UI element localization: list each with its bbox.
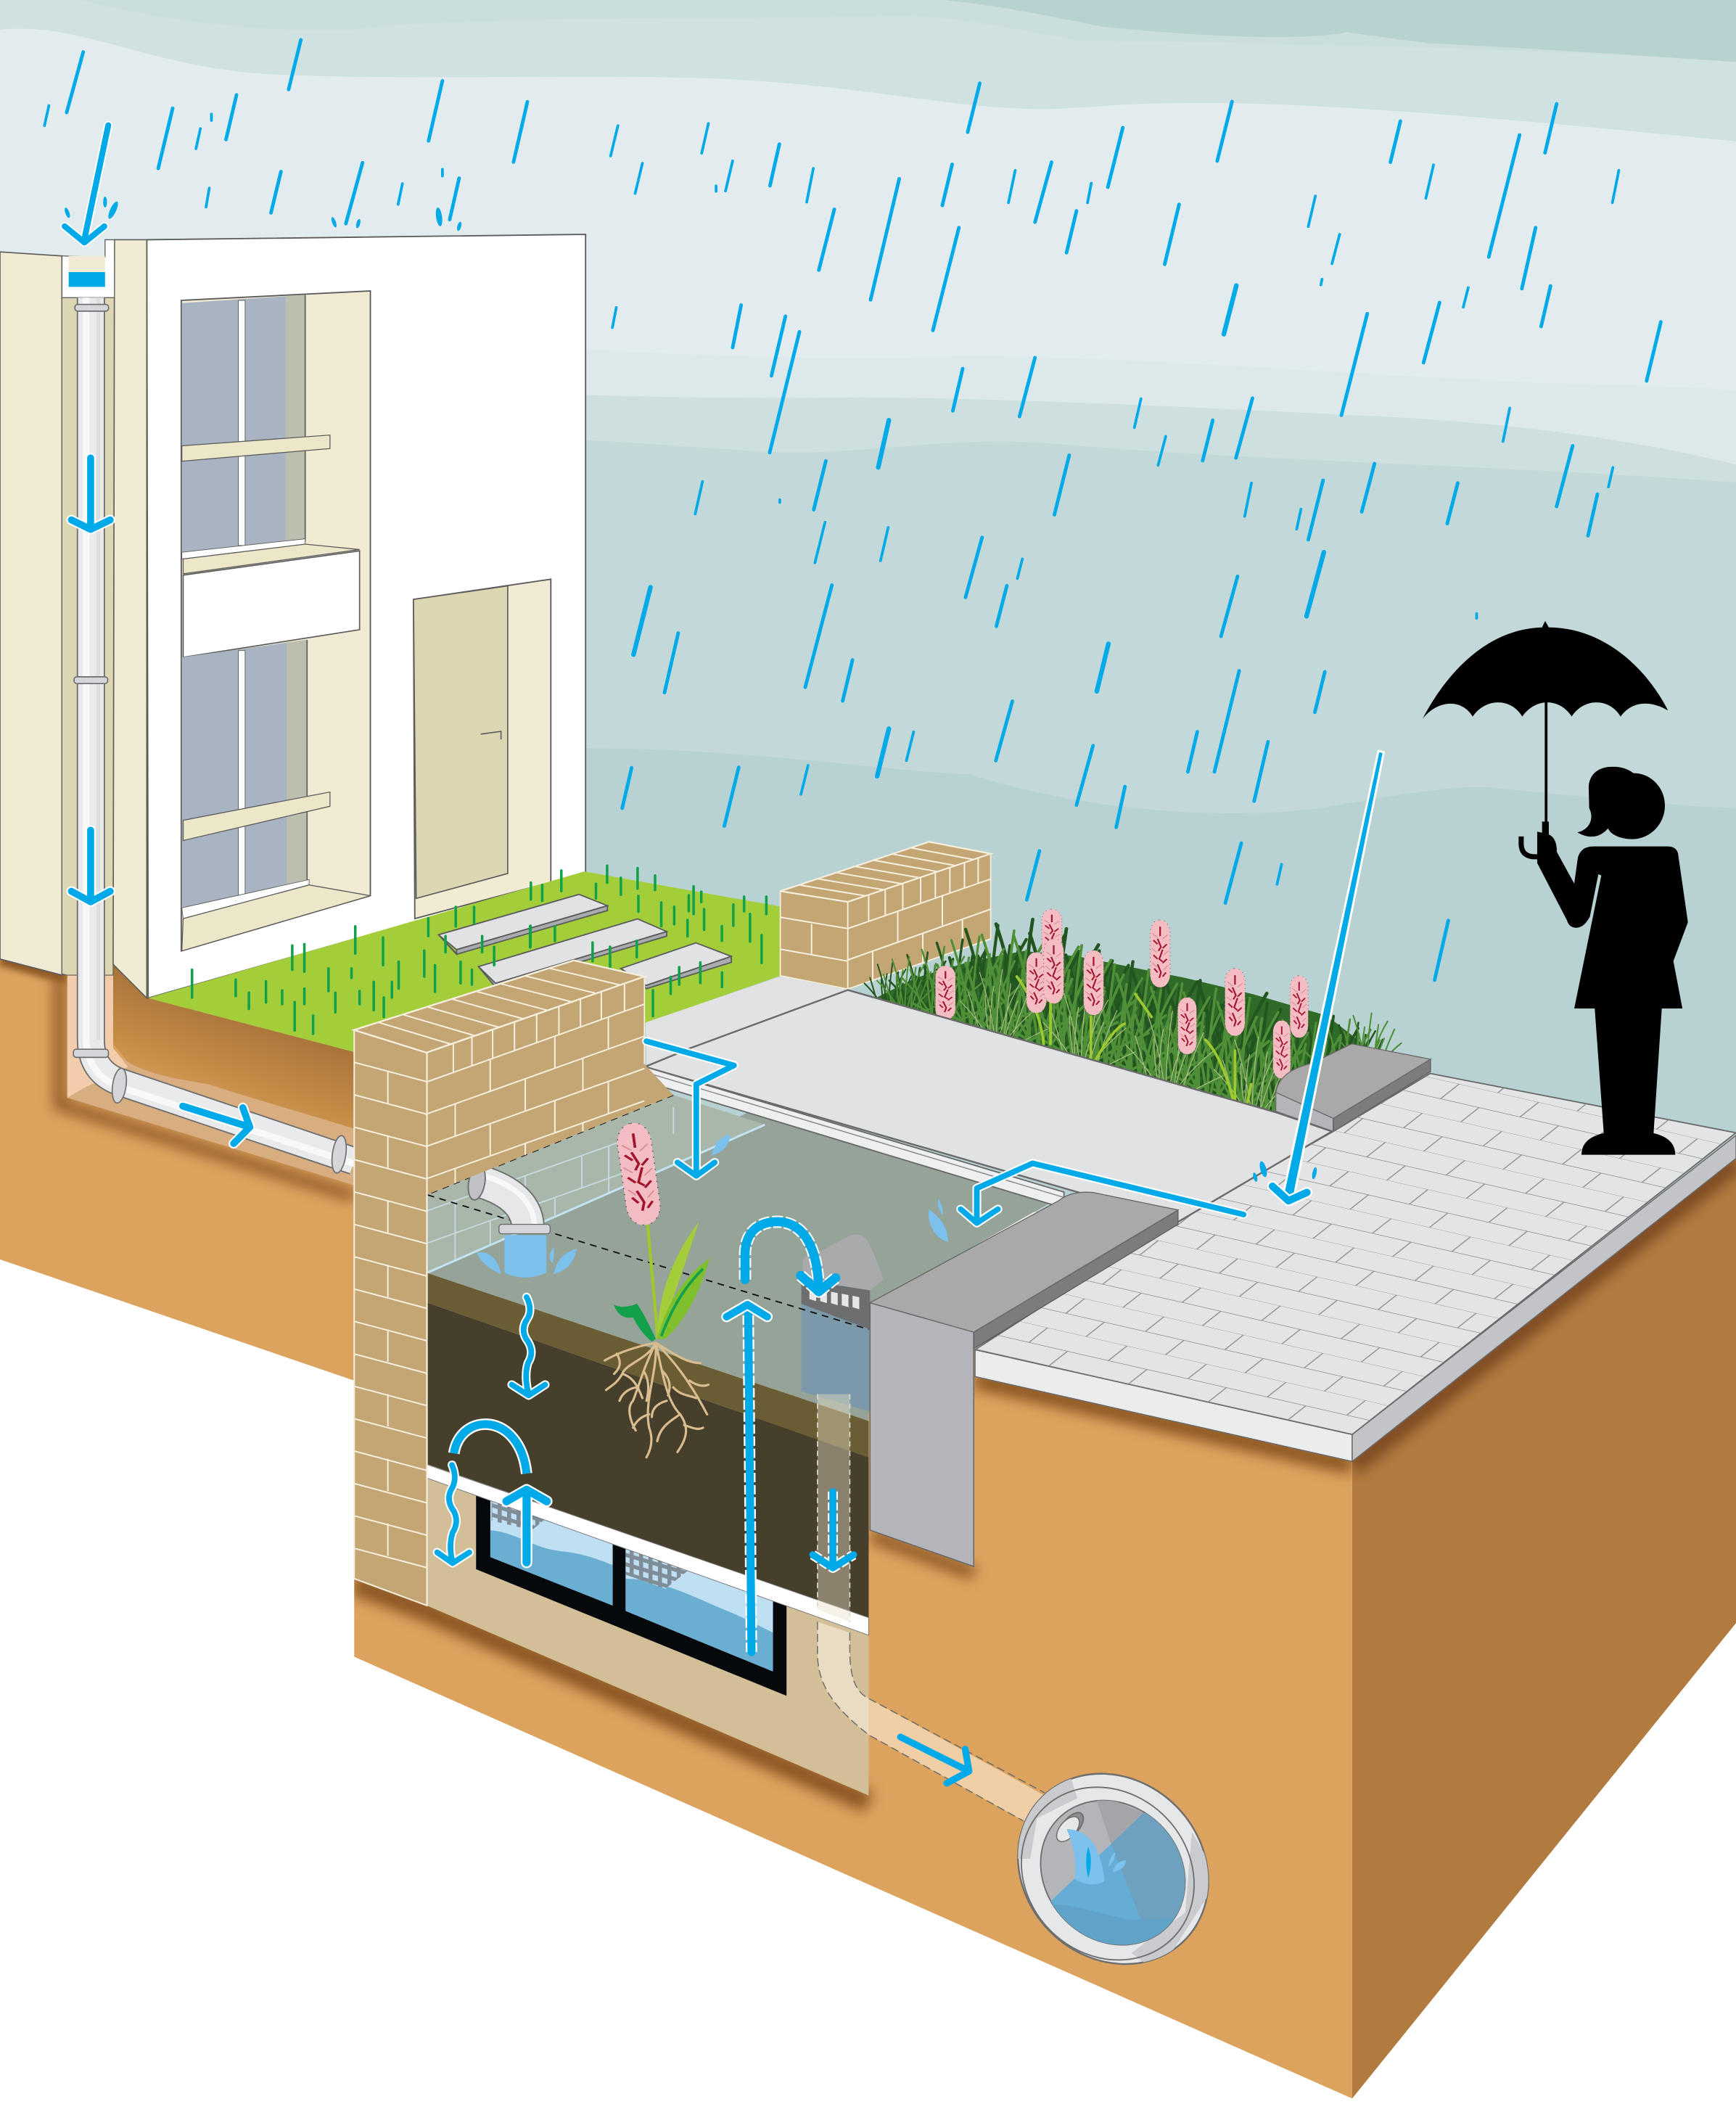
upper soil layer — [427, 1273, 868, 1458]
rain hopper — [62, 239, 115, 297]
leaves — [657, 1222, 699, 1334]
flow arrows — [65, 126, 1384, 1783]
lower glazing — [182, 640, 309, 919]
door handle — [481, 731, 501, 739]
balcony white panel — [183, 551, 360, 657]
outlet elbow pipe — [466, 1134, 948, 1278]
pipe clamps — [73, 305, 348, 1174]
left ground block — [0, 959, 354, 1381]
light green leaves — [1017, 977, 1251, 1112]
planter kerb — [870, 1192, 1178, 1566]
paving splashes — [1252, 1161, 1317, 1183]
trench vertical lit part — [67, 975, 128, 1098]
brick right face — [427, 977, 673, 1195]
window recess — [181, 291, 371, 951]
white geotextile band — [426, 1464, 868, 1635]
tank right cell — [625, 1549, 773, 1672]
front brick wall — [354, 961, 673, 1606]
lawn — [148, 871, 781, 1064]
window sill — [182, 885, 371, 951]
door — [414, 586, 508, 898]
lower shelf — [183, 792, 330, 840]
arrow: infiltration through soil — [511, 1297, 546, 1395]
sky with cloud bands — [0, 0, 1736, 1212]
grass mass — [847, 951, 1381, 1145]
paving — [975, 1074, 1736, 1461]
arrow: downpipe lower — [71, 830, 110, 902]
back planting with pink flower spikes — [847, 909, 1408, 1145]
planter interior — [426, 1095, 1050, 1796]
main ground right face — [1352, 1159, 1736, 2098]
brick left face — [354, 1030, 427, 1606]
rain drops — [44, 40, 1661, 980]
outlet water — [504, 1235, 546, 1278]
head and ponytail — [1577, 767, 1665, 839]
roots — [605, 1343, 709, 1458]
arrow: down overflow pipe — [813, 1492, 854, 1568]
paving top — [975, 1074, 1736, 1434]
person with umbrella — [1423, 621, 1688, 1155]
umbrella — [1423, 621, 1668, 719]
arrow: percolation into gravel — [437, 1465, 469, 1563]
upper glazing — [182, 295, 305, 559]
chamber interior — [1011, 1771, 1214, 1975]
chamber falling water — [1066, 1829, 1104, 1884]
kerb top — [870, 1192, 1178, 1332]
arrow: rain into hopper — [65, 126, 108, 242]
flower spikes — [935, 966, 955, 1019]
mid grass clumps — [868, 931, 1408, 1133]
outlet splashes — [477, 1134, 948, 1274]
arrow: rain onto paving — [1272, 751, 1384, 1201]
arrow: wicking arch — [454, 1424, 527, 1474]
umbrella shaft — [1544, 700, 1547, 829]
stepping stones — [438, 895, 731, 989]
arrow: tall overflow riser — [727, 1304, 768, 1652]
main ground front face — [354, 1347, 1352, 2098]
umbrella handle — [1521, 837, 1538, 857]
roof splashes — [64, 197, 462, 231]
door recess — [414, 579, 551, 919]
stem — [647, 1219, 658, 1339]
back brick wall — [781, 842, 991, 989]
overflow chamber — [802, 1234, 884, 1622]
soil surface — [427, 1112, 1050, 1421]
arrow: overflow curl into grate — [745, 1222, 836, 1291]
overflow pipe in soil — [818, 1394, 850, 1622]
arrow: along buried pipe — [183, 1106, 250, 1143]
back kerb — [1276, 1044, 1431, 1131]
drain trench — [67, 975, 354, 1186]
inspection chamber — [1017, 1773, 1209, 1965]
concrete main slab — [645, 990, 1332, 1222]
white main facade — [147, 234, 585, 998]
paving front edge — [975, 1349, 1352, 1461]
tan gravel base — [427, 1478, 868, 1796]
body — [1537, 831, 1688, 1155]
paving side edge — [1352, 1135, 1736, 1461]
pale grass highlights — [949, 969, 1306, 1129]
white lip of slab — [645, 1067, 1064, 1208]
lawn grass blades — [192, 866, 766, 1034]
arrow: runoff from paving into planter — [960, 1163, 1243, 1223]
arrow: outflow to chamber — [900, 1737, 969, 1783]
arrow: downpipe upper — [71, 458, 110, 530]
recess behind downpipe — [62, 297, 115, 975]
glass back wall — [427, 1095, 765, 1273]
dashed water line — [427, 1095, 868, 1329]
left house wall — [0, 252, 62, 975]
downpipe — [73, 297, 354, 1174]
tank left cell — [490, 1500, 613, 1606]
pipe continuing to chamber: outflow trench — [818, 1622, 1045, 1821]
brick top — [354, 961, 644, 1053]
flower spike — [615, 1121, 662, 1227]
dark grass clumps — [857, 919, 1397, 1138]
plant in planter — [605, 1121, 709, 1458]
overflow grille — [802, 1280, 870, 1329]
chamber inlet — [1056, 1809, 1087, 1841]
kerb face — [870, 1303, 974, 1566]
storage tank — [476, 1482, 786, 1696]
overflow dome — [802, 1234, 884, 1291]
upper shelf — [182, 435, 330, 461]
chamber ring — [979, 1735, 1247, 2003]
concrete rear slab — [646, 977, 848, 1064]
dark soil — [427, 1302, 868, 1618]
side strip of facade — [113, 239, 147, 998]
balcony ledge — [183, 544, 360, 574]
arrow: runoff from slab into planter — [646, 1041, 734, 1176]
arrow: water rising from tank — [506, 1490, 547, 1563]
kerb side — [974, 1210, 1178, 1349]
